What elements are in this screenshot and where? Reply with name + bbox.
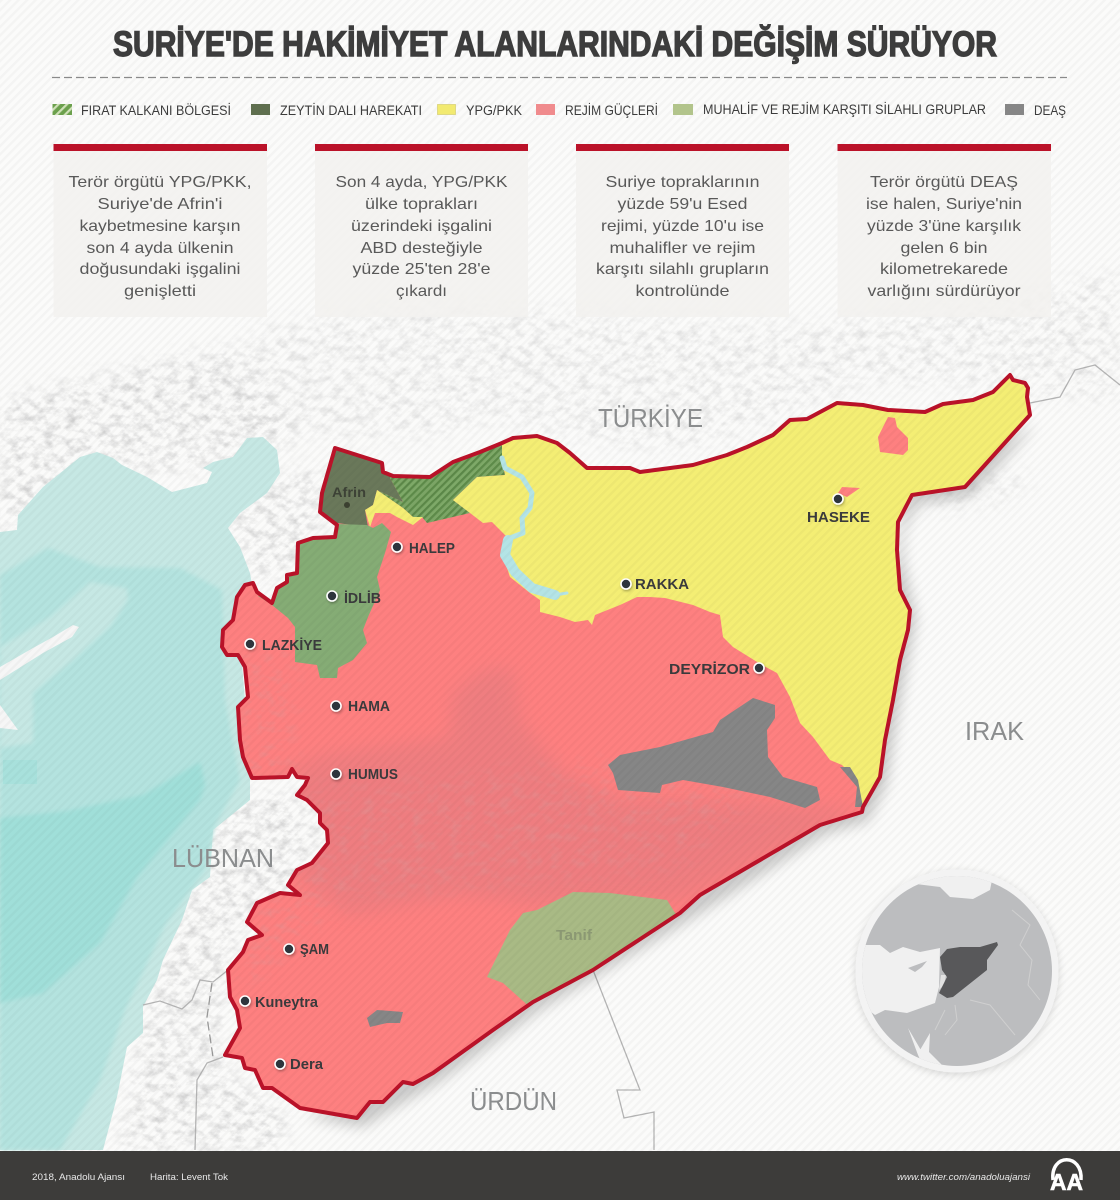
panel text: muhalifler ve rejim [610, 240, 756, 257]
footer bar [0, 1151, 1120, 1200]
globe: Black Sea [918, 876, 992, 899]
region: YPG/PKK near Afrin [365, 490, 423, 527]
panel text: Son 4 ayda, YPG/PKK [336, 174, 508, 191]
footer: map credit: Harita: Levent Tok [150, 1172, 228, 1183]
label: Iraq: IRAK [965, 716, 1025, 746]
globe: Lebanon [939, 975, 946, 990]
Syria outline [222, 375, 1030, 1118]
region: DEAS main pocket [608, 698, 820, 808]
panel text: Terör örgütü YPG/PKK, [68, 174, 252, 191]
city: Deyrizor: DEYRİZOR [669, 661, 751, 678]
city: Idlib [327, 590, 381, 607]
panel text: son 4 ayda ülkenin [86, 240, 234, 257]
globe: borders [935, 910, 1040, 1035]
sea: mid depth [0, 548, 240, 1150]
legend: DEAS: DEAŞ [1034, 103, 1066, 118]
region: Euphrates Shield [378, 445, 505, 523]
legend: Rejim [536, 103, 658, 118]
sea: Cyprus shelf [0, 582, 128, 748]
legend: DEAS [1005, 103, 1066, 118]
panel text: ABD desteğiyle [360, 240, 483, 257]
region: Idlib opposition [258, 523, 391, 678]
label: Lebanon: LÜBNAN [172, 843, 274, 873]
panel text [596, 174, 769, 300]
region: Tanf opposition [487, 892, 676, 1004]
panel text: çıkardı [396, 283, 447, 300]
title: SURİYE'DE HAKİMİYET ALANLARINDAKİ DEĞİŞİM SÜRÜYOR [113, 24, 997, 64]
panel text: karşıtı silahlı grupların [596, 261, 769, 278]
panel text [866, 174, 1022, 300]
footer: twitter url: www.twitter.com/anadoluajansi [897, 1172, 1031, 1183]
city: Humus: HUMUS [348, 767, 398, 783]
footer: credit: 2018, Anadolu Ajansı [32, 1172, 125, 1183]
panel text: kaybetmesine karşın [80, 218, 240, 235]
panel text: varlığını sürdürüyor [868, 283, 1021, 300]
island: Cyprus [0, 625, 79, 730]
locator globe [850, 860, 1058, 1072]
terrain relief: faint northern band [250, 270, 1120, 510]
city: Afrin [332, 484, 366, 508]
panel text: kontrolünde [636, 283, 730, 300]
panel: YPG/PKK share [315, 144, 528, 317]
globe: Red Sea [908, 1028, 942, 1064]
label: Turkey: TÜRKİYE [598, 403, 703, 433]
city: Dera [275, 1057, 324, 1073]
label: Tanif: Tanif [556, 928, 592, 944]
legend [52, 102, 1066, 118]
globe: Cyprus [908, 961, 927, 972]
city: Halep: HALEP [409, 541, 455, 557]
panel text: Terör örgütü DEAŞ [870, 174, 1018, 191]
Syria drop shadow [306, 424, 1036, 1127]
legend: Firat Kalkani: FIRAT KALKANI BÖLGESİ [81, 103, 231, 118]
panel text [68, 174, 252, 300]
city: Rakka: RAKKA [635, 577, 690, 593]
region: regime forces [224, 470, 862, 1116]
panel text: genişletti [124, 283, 196, 300]
legend: Zeytin Dali: ZEYTİN DALI HAREKATI [280, 103, 422, 118]
region: YPG/PKK east [453, 378, 1028, 804]
city: Lazkiye: LAZKİYE [262, 637, 322, 654]
panel text: Suriye'de Afrin'i [98, 196, 222, 213]
city: Sam [284, 942, 329, 958]
panel text: yüzde 3'üne karşılık [867, 218, 1022, 235]
panel text: yüzde 59'u Esed [618, 196, 748, 213]
region: DEAS border pocket [840, 767, 863, 807]
legend: Rejim: REJİM GÜÇLERİ [565, 103, 658, 118]
panel text: doğusundaki işgalini [80, 261, 240, 278]
river Euphrates [502, 458, 567, 595]
sea: small deep patch [3, 760, 37, 784]
neighbouring borders [143, 365, 1120, 1150]
darker desert band [265, 668, 860, 915]
city: Idlib: İDLİB [344, 590, 381, 607]
city: Sam: ŞAM [300, 942, 329, 958]
region: regime pocket Haseke [838, 487, 860, 497]
region: Afrin, Olive Branch [322, 450, 403, 526]
panel text: yüzde 25'ten 28'e [352, 261, 491, 278]
globe: Syria [939, 942, 998, 998]
panel: YPG/PKK east gains [54, 144, 267, 317]
panel text: ülke toprakları [365, 196, 478, 213]
globe: Mediterranean [862, 945, 940, 1015]
footer: AA logo: AA [1050, 1169, 1083, 1195]
map of Syria [224, 378, 1028, 1116]
sea: shallow water [0, 437, 280, 1150]
region: DEAS south pocket [367, 1010, 403, 1027]
legend: Muhalif: MUHALİF VE REJİM KARŞITI SİLAHLI GRUPLAR [703, 102, 986, 117]
dashed divider under title [52, 76, 1067, 78]
inner shading of relief [244, 658, 728, 964]
panel: regime share [576, 144, 789, 317]
legend: YPG/PKK: YPG/PKK [466, 103, 522, 118]
panel text: kilometrekarede [880, 261, 1008, 278]
legend: YPG/PKK [438, 103, 522, 118]
panel text: Suriye topraklarının [606, 174, 760, 191]
panel text: rejimi, yüzde 10'u ise [601, 218, 764, 235]
panel text [336, 174, 508, 300]
region: regime pocket Qamishli [878, 417, 908, 455]
city: Haseke: HASEKE [807, 510, 870, 526]
terrain relief: coastal mountains [0, 345, 325, 1150]
city: Afrin: Afrin [332, 484, 366, 500]
city: Hama: HAMA [348, 699, 391, 715]
sea: deep water [0, 762, 205, 1003]
panel: DEAS share [838, 144, 1051, 317]
label: Jordan: ÜRDÜN [470, 1086, 557, 1116]
city: Haseke [807, 494, 870, 526]
city: Dera: Dera [290, 1057, 324, 1073]
city: Halep [392, 541, 455, 557]
panel text: üzerindeki işgalini [351, 218, 492, 235]
panel text: ise halen, Suriye'nin [866, 196, 1022, 213]
panel text: gelen 6 bin [900, 240, 988, 257]
city: Kuneytra: Kuneytra [255, 995, 319, 1011]
